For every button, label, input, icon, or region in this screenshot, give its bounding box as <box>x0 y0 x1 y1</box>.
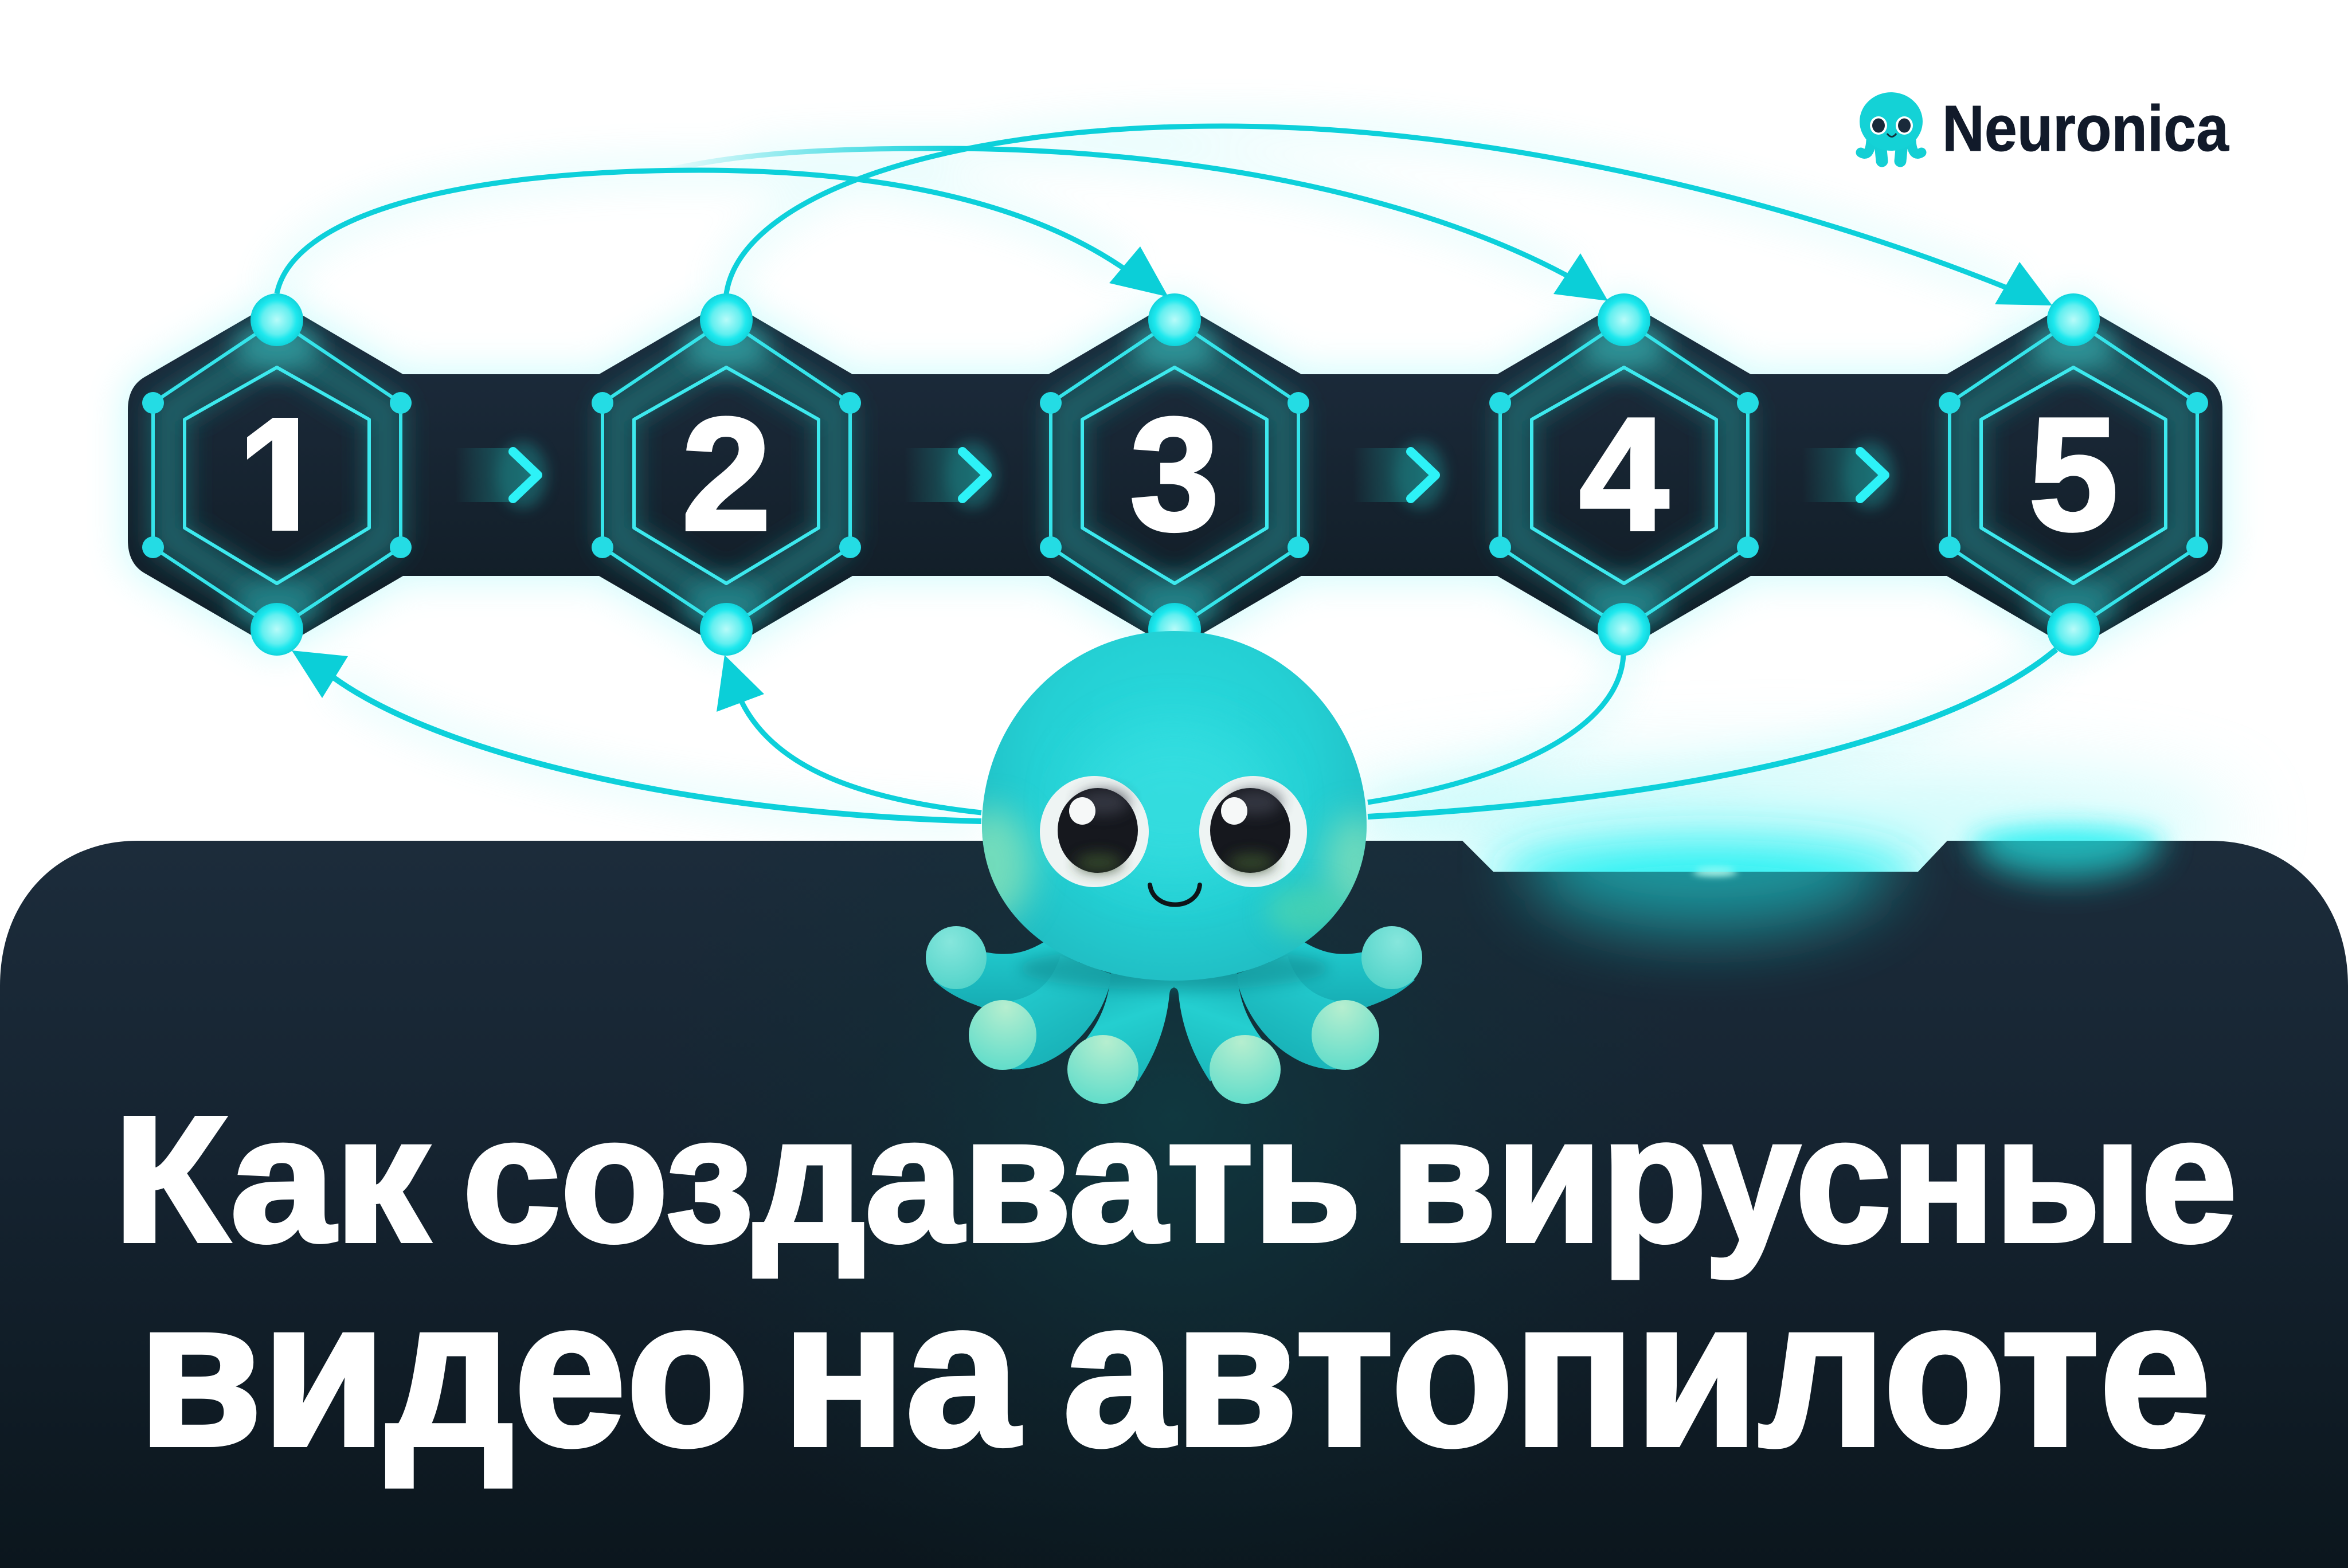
left eye <box>1040 776 1149 887</box>
title line 1: вирусные <box>1391 1079 2237 1280</box>
tentacles left <box>926 926 1181 1104</box>
arrow: from octopus to step 1 <box>292 650 981 821</box>
step 3 hexagon <box>1040 293 1309 656</box>
shadow under head <box>1019 947 1329 990</box>
title line 1: создавать <box>463 1079 1361 1279</box>
chevron arrow 1 to 2 <box>455 442 547 508</box>
number 1: 1 <box>238 382 330 566</box>
panel: dark bottom panel with notch <box>0 794 2348 1568</box>
octopus mascot <box>926 631 1422 1104</box>
chevron arrow 4 to 5 <box>1802 442 1894 508</box>
step 2 hexagon <box>592 293 861 656</box>
smile <box>1150 885 1200 904</box>
hexagon chain band <box>128 300 2222 650</box>
number 3: 3 <box>1130 385 1219 564</box>
glow: halo around hexagon band <box>128 300 2222 650</box>
wordmark: Neuronica <box>1942 92 2229 164</box>
arrow: arc from step 3 area to step 4 <box>648 148 1608 301</box>
logo: Neuronica <box>1860 92 2229 164</box>
arrow: arc from step 2 to step 5 <box>726 126 2052 305</box>
title line 2: автопилоте <box>1063 1256 2211 1489</box>
number 2: 2 <box>682 385 771 564</box>
title line 2: на <box>782 1256 1020 1489</box>
glow: faint halo around arc lines <box>277 126 2056 821</box>
step 4 hexagon <box>1489 293 1759 656</box>
glow above the panel notch <box>1318 768 2236 920</box>
chevron arrow 2 to 3 <box>905 442 996 508</box>
icon: small octopus <box>1860 92 1923 161</box>
arrow: from step 4 to octopus <box>1368 655 1623 802</box>
number 5: 5 <box>2029 385 2118 564</box>
right eye <box>1199 776 1307 887</box>
arrow: from octopus to step 2 <box>717 655 981 813</box>
title line 2: видео <box>138 1256 749 1489</box>
title <box>114 1079 2237 1489</box>
step 5 hexagon <box>1939 293 2208 656</box>
chevron arrow 3 to 4 <box>1353 442 1445 508</box>
number 4: 4 <box>1579 385 1670 564</box>
arrow: from step 5 to octopus <box>1368 649 2056 817</box>
title line 1: Как <box>114 1079 432 1279</box>
step 1 hexagon <box>142 293 412 656</box>
head <box>982 631 1367 981</box>
arrow: arc from step 1 to step 3 <box>277 170 1168 297</box>
tentacles right <box>1167 926 1422 1104</box>
